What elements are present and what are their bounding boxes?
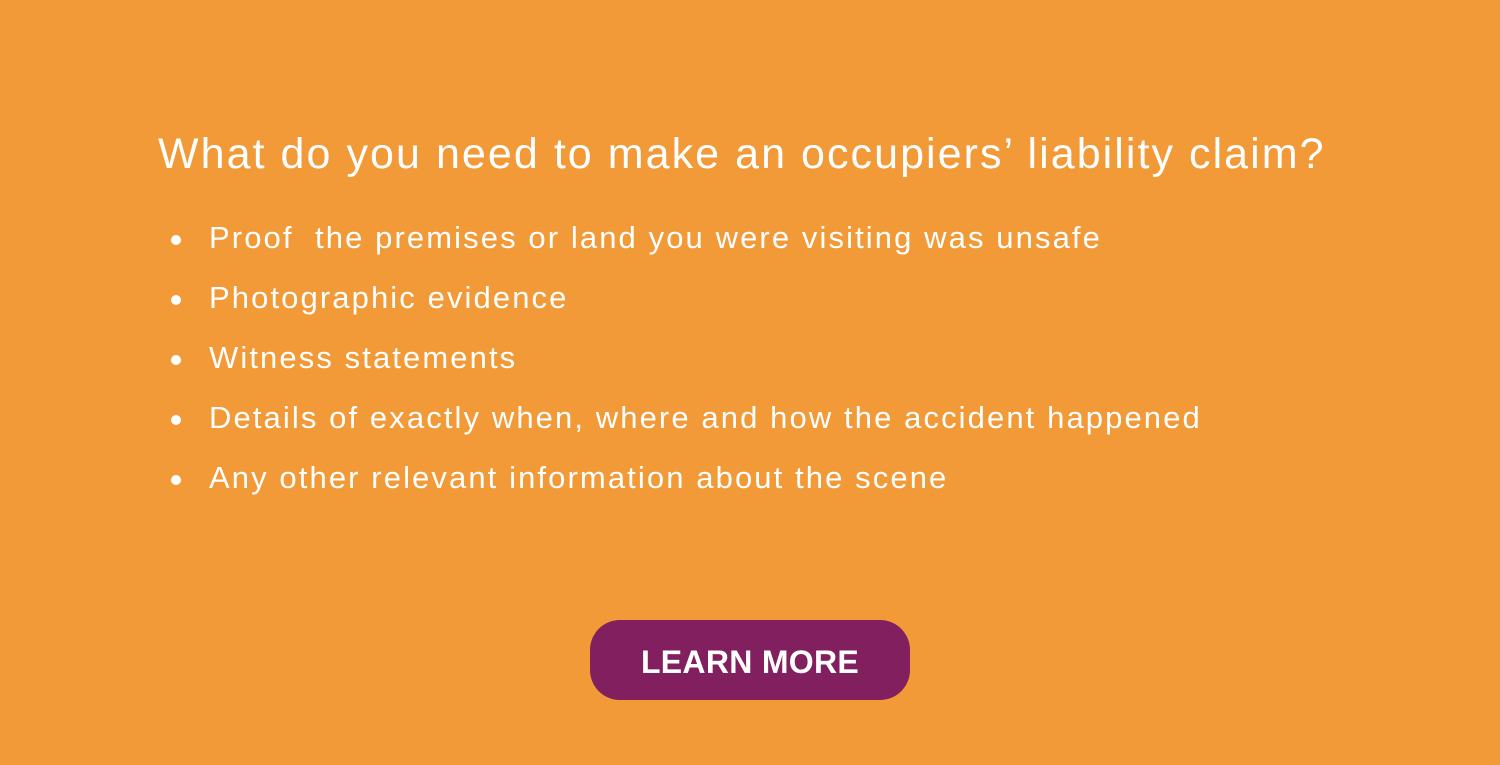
bullet: proof: Proof the premises or land you were visiting was unsafe	[209, 220, 1102, 255]
title: What do you need to make an occupiers’ liability claim?	[158, 130, 1326, 178]
bullet: witness statements: Witness statements	[209, 340, 517, 375]
button: learn more: LEARN MORE	[641, 644, 859, 680]
bullet: photographic evidence: Photographic evidence	[209, 280, 568, 315]
button: learn more	[590, 620, 910, 700]
bullet: details: Details of exactly when, where and how the accident happened	[209, 400, 1202, 435]
bullet: other info: Any other relevant information about the scene	[209, 460, 948, 495]
bullet list	[171, 220, 1202, 495]
